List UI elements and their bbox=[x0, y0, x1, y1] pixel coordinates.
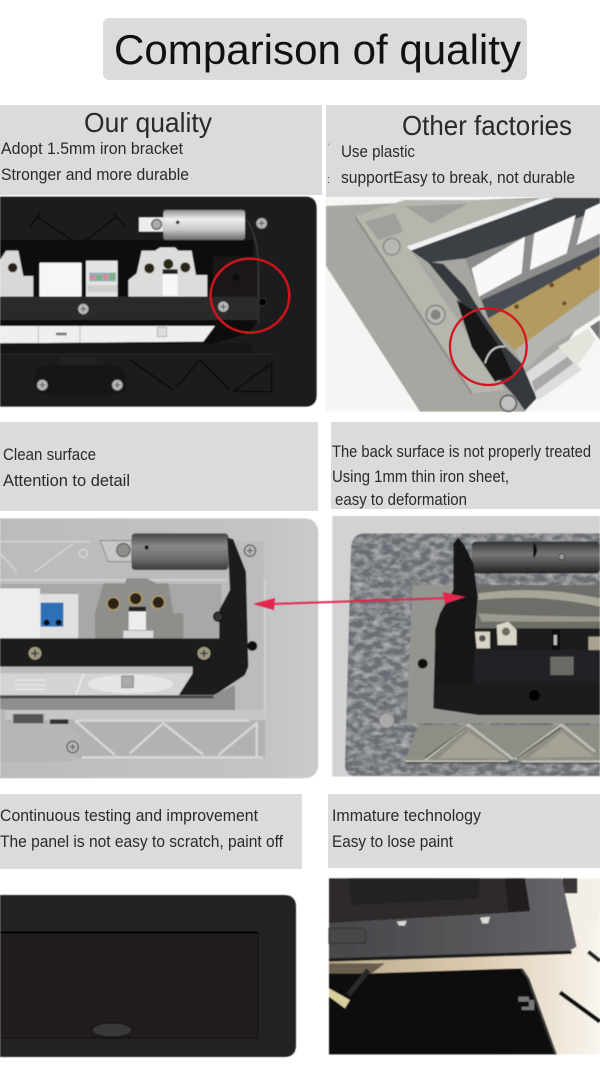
panel: back surface text: easy to deformation bbox=[335, 491, 467, 509]
panel: back surface text: Using 1mm thin iron sheet, bbox=[332, 468, 509, 486]
shadow lip bbox=[0, 685, 235, 710]
black case bbox=[433, 628, 600, 715]
photo: other factory paint loss bbox=[329, 878, 600, 1054]
black bracket bbox=[435, 537, 478, 683]
panel: clean surface text: Attention to detail bbox=[3, 472, 130, 490]
bracket bar bbox=[0, 297, 258, 320]
photo: our clean grey rear panel bbox=[0, 518, 318, 778]
white windows bbox=[472, 237, 525, 297]
red circle callout bbox=[450, 308, 527, 385]
aluminium plate bbox=[326, 197, 600, 412]
panel: our quality heading: Adopt 1.5mm iron bracket bbox=[1, 140, 183, 158]
black bracket bbox=[0, 537, 248, 696]
panel: other factories heading: Use plastic bbox=[341, 143, 415, 161]
latch bbox=[33, 365, 127, 395]
white terminal block bbox=[128, 247, 207, 297]
brass floor bbox=[488, 255, 600, 350]
photo: other factory rough rear panel bbox=[332, 516, 600, 777]
dark frame bbox=[411, 198, 600, 263]
inner well bbox=[0, 584, 222, 638]
panel: other factories heading: Other factories bbox=[402, 110, 572, 141]
cylinder bbox=[472, 542, 600, 573]
panel: our quality heading: Stronger and more durable bbox=[1, 166, 189, 184]
lower triangles bbox=[405, 725, 600, 762]
photo: other factory plastic bracket broken bbox=[326, 197, 600, 412]
photo: our iron bracket on black panel bbox=[0, 197, 317, 407]
photo: our smooth black panel bbox=[0, 895, 296, 1057]
bottom right white bbox=[538, 350, 600, 412]
panel: immature technology text: Immature technology bbox=[332, 807, 482, 825]
panel: back surface text bbox=[331, 422, 600, 509]
cylinder bbox=[525, 347, 582, 400]
faceplate bbox=[0, 673, 193, 695]
upper ribs bbox=[0, 542, 227, 580]
panel: our quality heading: Our quality bbox=[84, 107, 212, 138]
panel: immature technology text: Easy to lose paint bbox=[332, 833, 453, 851]
left terminal bbox=[0, 251, 33, 297]
hinge cylinder bbox=[139, 217, 163, 232]
hinge bbox=[100, 541, 132, 562]
title: Comparison of quality bbox=[114, 26, 521, 73]
panel: continuous testing text: The panel is not easy to scratch, paint off bbox=[0, 833, 283, 851]
panel: clean surface text bbox=[0, 422, 318, 511]
white strip bbox=[407, 198, 555, 251]
panel: continuous testing text: Continuous testing and improvement bbox=[0, 807, 258, 825]
frame below bbox=[0, 710, 265, 720]
double-headed red arrow bbox=[253, 592, 466, 610]
white faceplate bbox=[0, 326, 215, 343]
plastic bracket bbox=[428, 262, 537, 411]
latch bbox=[0, 709, 80, 762]
panel frame bbox=[329, 878, 577, 960]
panel: other factories heading: : bbox=[327, 174, 330, 186]
table bbox=[329, 878, 600, 1054]
screwdriver bbox=[560, 992, 600, 1022]
panel: our quality heading bbox=[0, 105, 322, 195]
light cavity wall bbox=[408, 198, 600, 350]
lower ribs bbox=[75, 721, 263, 757]
clips bbox=[475, 632, 490, 648]
grey terminal bbox=[95, 578, 183, 638]
ribs bbox=[130, 360, 272, 392]
panel: other factories heading: ' bbox=[328, 142, 330, 152]
open box bbox=[329, 968, 557, 1054]
red circle callout bbox=[211, 259, 289, 333]
panel: continuous testing text bbox=[0, 794, 302, 869]
panel: clean surface text: Clean surface bbox=[3, 446, 96, 464]
panel: immature technology text bbox=[328, 794, 600, 868]
panel: other factories heading bbox=[326, 105, 600, 197]
panel: other factories heading: supportEasy to break, not durable bbox=[341, 169, 575, 187]
